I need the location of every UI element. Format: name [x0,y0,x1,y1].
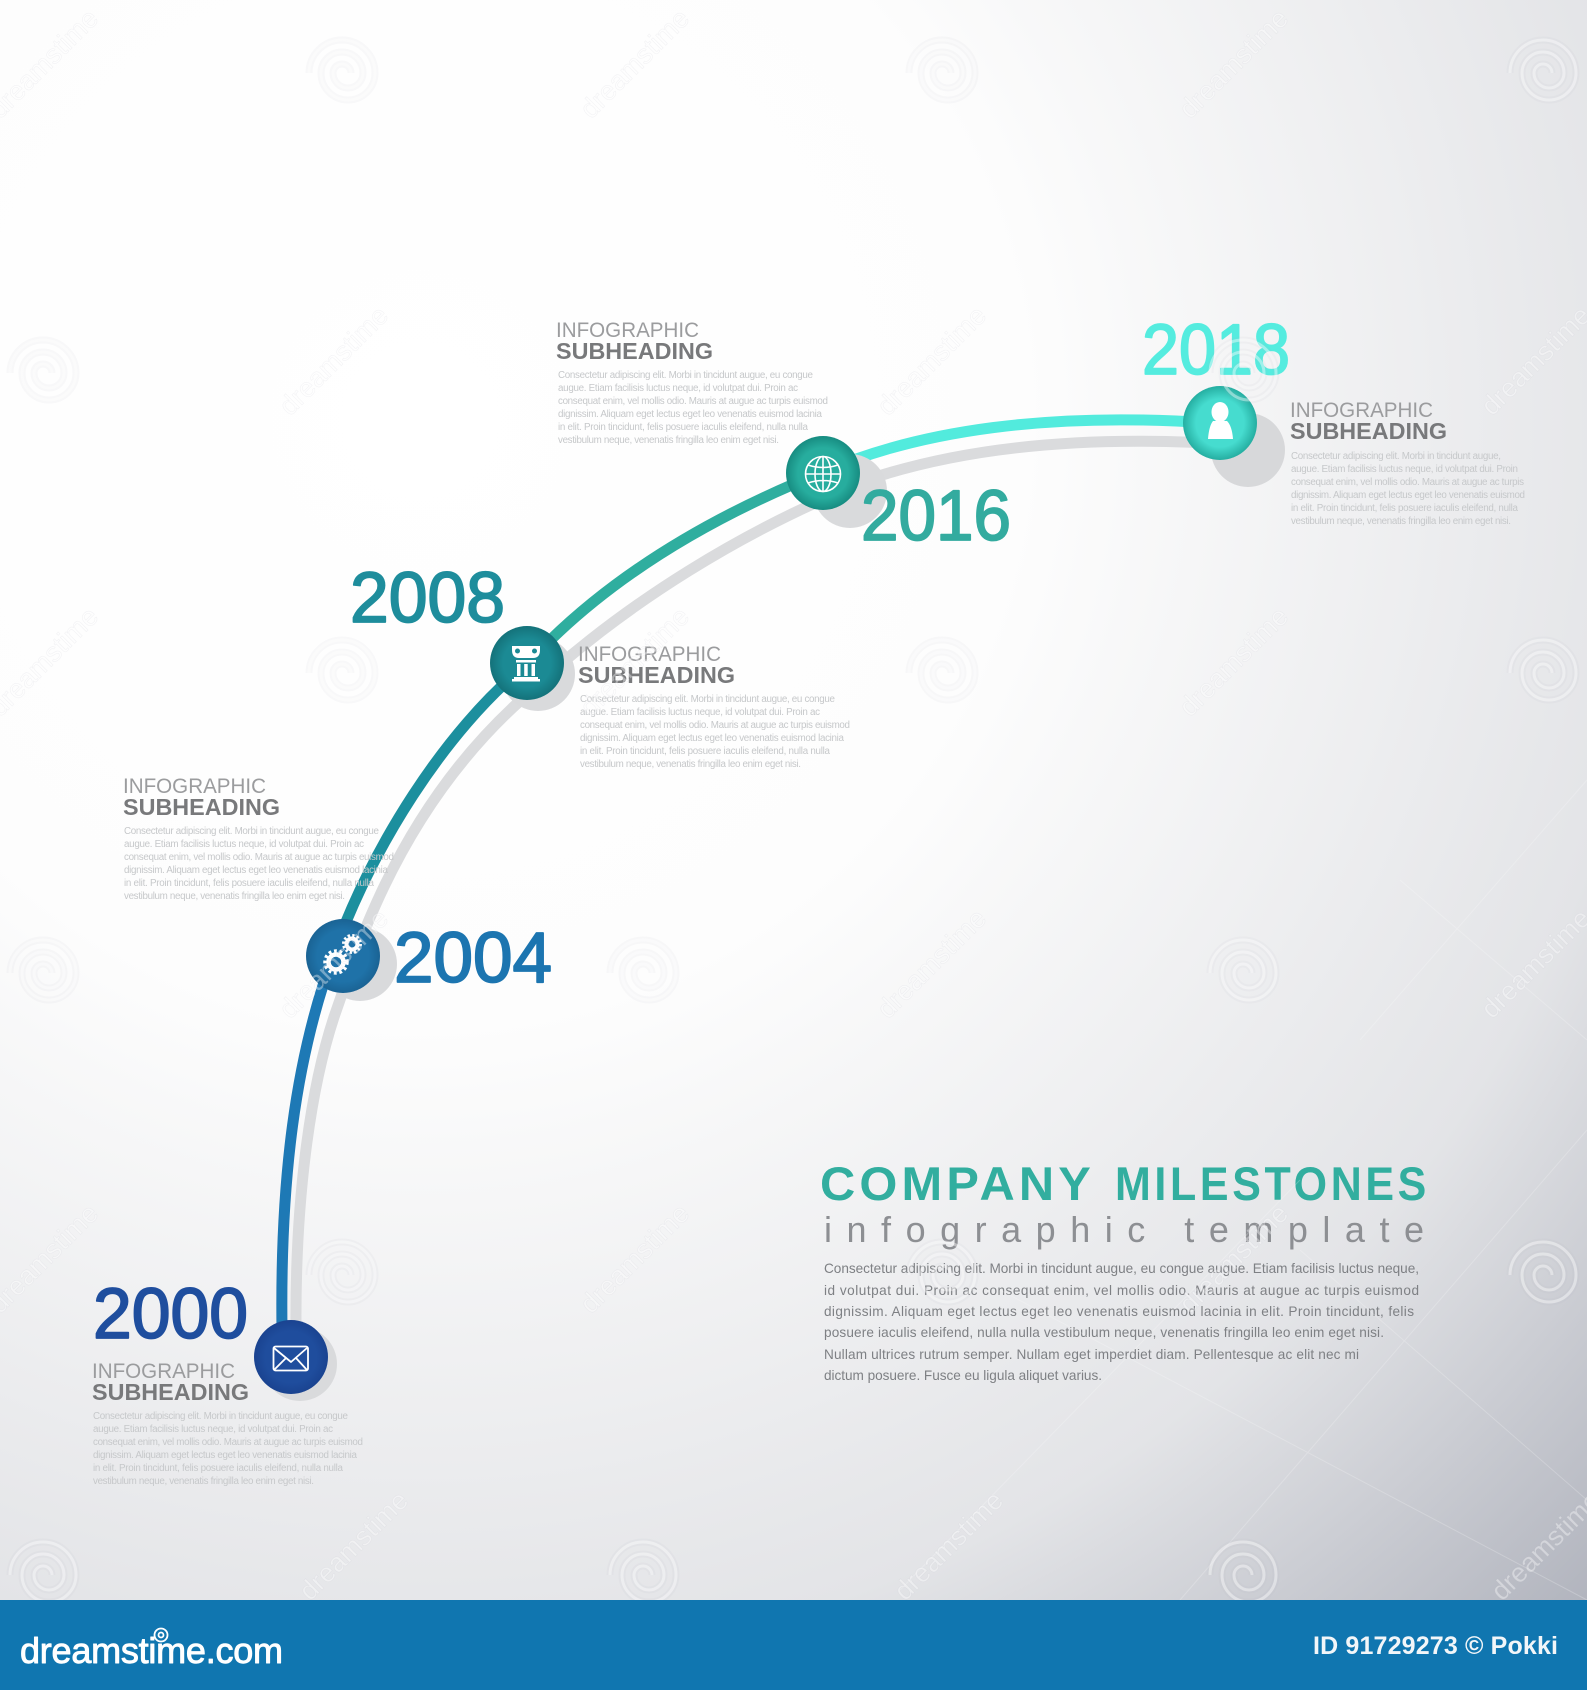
subheading [578,643,735,688]
body text: augue. Etiam facilisis luctus neque, id volutpat dui. Proin [1291,464,1518,475]
year: 2016 [861,477,1011,556]
body text: Consectetur adipiscing elit. Morbi in tincidunt augue, eu congue [93,1411,349,1422]
description: Nullam ultrices rutrum semper. Nullam eget imperdiet diam. Pellentesque ac elit nec mi [824,1347,1359,1362]
body text: Consectetur adipiscing elit. Morbi in tincidunt augue, eu congue [558,370,814,381]
watermark pattern: dreamstime [888,1485,1009,1606]
subheading [556,319,713,364]
year: 2008 [350,559,505,638]
watermark pattern: dreamstime [1173,601,1294,722]
year: 2018 [1142,311,1290,390]
milestone 2004 [123,775,552,1001]
body text: dignissim. Aliquam eget lectus eget leo venenatis euismod [1291,490,1525,501]
watermark pattern: dreamstime [574,3,695,124]
watermark pattern: dreamstime [574,601,695,722]
body text: consequat enim, vel mollis odio. Mauris at augue ac turpis euismod [558,396,828,407]
watermark pattern: dreamstime [871,300,992,421]
body text [1291,451,1525,527]
icon: gears [325,936,360,973]
subheading: INFOGRAPHIC [1290,399,1433,422]
title: MILESTONES [1115,1157,1430,1210]
body text: in elit. Proin tincidunt, felis posuere iaculis eleifend, nulla [1291,503,1519,514]
title [820,1157,1430,1210]
node shadow [813,454,887,528]
node shadow [1211,413,1285,487]
subheading: INFOGRAPHIC [556,319,699,342]
body text [124,826,394,902]
subheading: INFOGRAPHIC [578,643,721,666]
curve shadow [296,441,1240,1330]
subheading [92,1360,249,1405]
icon: globe [806,456,840,492]
node shadow [501,637,575,711]
description: dictum posuere. Fusce eu ligula aliquet varius. [824,1368,1102,1383]
description: dignissim. Aliquam eget lectus eget leo venenatis euismod lacinia in elit. Proin tincidunt, felis [824,1304,1414,1319]
node [306,919,380,993]
node [786,436,860,510]
body text [580,694,850,770]
body text: consequat enim, vel mollis odio. Mauris at augue ac turpis euismod [124,852,394,863]
body text: in elit. Proin tincidunt, felis posuere iaculis eleifend, nulla nulla [93,1463,344,1474]
description: posuere iaculis eleifend, nulla nulla vestibulum neque, venenatis fringilla leo enim eget nisi. [824,1325,1384,1340]
subheading: SUBHEADING [92,1379,249,1405]
watermark pattern: dreamstime [273,300,394,421]
icon: person [1208,402,1233,439]
body text: Consectetur adipiscing elit. Morbi in tincidunt augue, [1291,451,1501,462]
logo text: dreamstime.com [20,1630,283,1671]
milestone 2008 [350,559,850,770]
body text: augue. Etiam facilisis luctus neque, id volutpat dui. Proin ac [580,707,820,718]
subheading: SUBHEADING [123,794,280,820]
body text: consequat enim, vel mollis odio. Mauris at augue ac turpis euismod [93,1437,363,1448]
footer banner [0,1600,1587,1690]
watermark pattern: dreamstime [293,1485,414,1606]
curve segment 2016 to 2018 [823,420,1210,472]
watermark pattern: dreamstime [574,1198,695,1319]
title: COMPANY [820,1157,1095,1210]
body text [558,370,828,446]
subheading: INFOGRAPHIC [92,1360,235,1383]
body text: in elit. Proin tincidunt, felis posuere iaculis eleifend, nulla nulla [558,422,809,433]
body text: vestibulum neque, venenatis fringilla leo enim eget nisi. [93,1476,314,1487]
node [1183,386,1257,460]
description: id volutpat dui. Proin ac consequat enim, vel mollis odio. Mauris at augue ac turpis euismod [824,1283,1419,1298]
body text: vestibulum neque, venenatis fringilla leo enim eget nisi. [124,891,345,902]
node [490,626,564,700]
watermark pattern: dreamstime [1173,3,1294,124]
subheading: SUBHEADING [1290,418,1447,444]
subheading: SUBHEADING [556,338,713,364]
node shadow [323,927,397,1001]
curve segment 2000 to 2004 [282,956,333,1330]
timeline curve [282,420,1210,1330]
body text: augue. Etiam facilisis luctus neque, id volutpat dui. Proin ac [558,383,798,394]
milestone 2018 [1142,311,1525,527]
node [254,1320,328,1394]
watermark pattern: dreamstime [871,903,992,1024]
milestone 2016 [556,319,1011,556]
subtitle: infographic template [824,1209,1424,1250]
watermark pattern: dreamstime [273,903,394,1024]
subheading: INFOGRAPHIC [123,775,266,798]
logo spiral [154,1628,168,1642]
body text: consequat enim, vel mollis odio. Mauris at augue ac turpis [1291,477,1524,488]
body text: augue. Etiam facilisis luctus neque, id volutpat dui. Proin ac [93,1424,333,1435]
body text: vestibulum neque, venenatis fringilla leo enim eget nisi. [1291,516,1511,527]
year: 2004 [394,919,552,998]
curve segment 2004 to 2008 [333,664,527,956]
body text: dignissim. Aliquam eget lectus eget leo venenatis euismod lacinia [93,1450,358,1461]
title block [820,1157,1430,1383]
body text: Consectetur adipiscing elit. Morbi in tincidunt augue, eu congue [580,694,836,705]
body text: consequat enim, vel mollis odio. Mauris at augue ac turpis euismod [580,720,850,731]
milestone 2000 [92,1275,363,1487]
body text: vestibulum neque, venenatis fringilla leo enim eget nisi. [558,435,779,446]
subheading: SUBHEADING [578,662,735,688]
body text: dignissim. Aliquam eget lectus eget leo venenatis euismod lacinia [580,733,845,744]
icon: column [512,646,540,682]
body text: in elit. Proin tincidunt, felis posuere iaculis eleifend, nulla nulla [580,746,831,757]
body text: dignissim. Aliquam eget lectus eget leo venenatis euismod lacinia [558,409,823,420]
body text: dignissim. Aliquam eget lectus eget leo venenatis euismod lacinia [124,865,389,876]
body text: vestibulum neque, venenatis fringilla leo enim eget nisi. [580,759,801,770]
banner background [0,1600,1587,1690]
body text: Consectetur adipiscing elit. Morbi in tincidunt augue, eu congue [124,826,380,837]
subheading [123,775,280,820]
description: Consectetur adipiscing elit. Morbi in tincidunt augue, eu congue augue. Etiam facilisis luctus neque, [824,1261,1419,1276]
body text: augue. Etiam facilisis luctus neque, id volutpat dui. Proin ac [124,839,364,850]
body text: in elit. Proin tincidunt, felis posuere iaculis eleifend, nulla nulla [124,878,375,889]
description [824,1261,1419,1383]
subheading [1290,399,1447,444]
curve segment 2008 to 2016 [527,472,823,664]
image id: ID 91729273 © Pokki [1313,1632,1558,1660]
icon: envelope [274,1346,308,1370]
year: 2000 [93,1275,248,1354]
watermark pattern: dreamstime [1173,1198,1294,1319]
node shadow [263,1327,337,1401]
body text [93,1411,363,1487]
